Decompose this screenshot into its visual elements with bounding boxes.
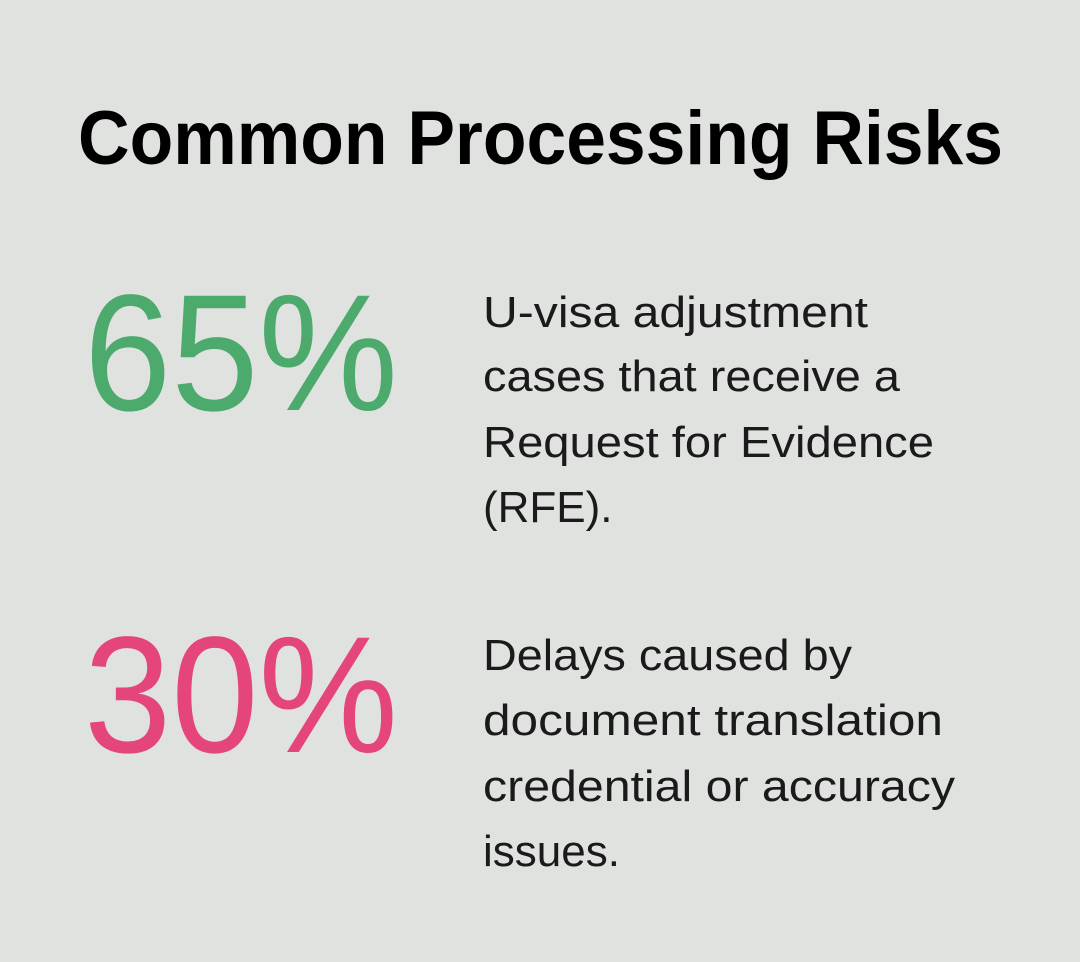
title: Common Processing Risks (78, 96, 1003, 181)
stat: 30% (84, 603, 955, 876)
description: translation delays: credential or accuracy (483, 762, 955, 811)
description: translation delays: issues. (483, 827, 620, 876)
description: translation delays: Delays caused by (483, 631, 852, 680)
description: translation delays: document translation (483, 696, 943, 745)
description: RFE (483, 288, 934, 532)
description: RFE: (RFE). (483, 483, 613, 532)
description: RFE: Request for Evidence (483, 418, 934, 467)
description: RFE: cases that receive a (483, 352, 901, 401)
description: translation delays (483, 631, 955, 876)
stat: 65% (84, 261, 934, 532)
number: 30%: 30% (84, 603, 398, 788)
description: RFE: U-visa adjustment (483, 288, 868, 337)
number: 65%: 65% (84, 261, 398, 446)
